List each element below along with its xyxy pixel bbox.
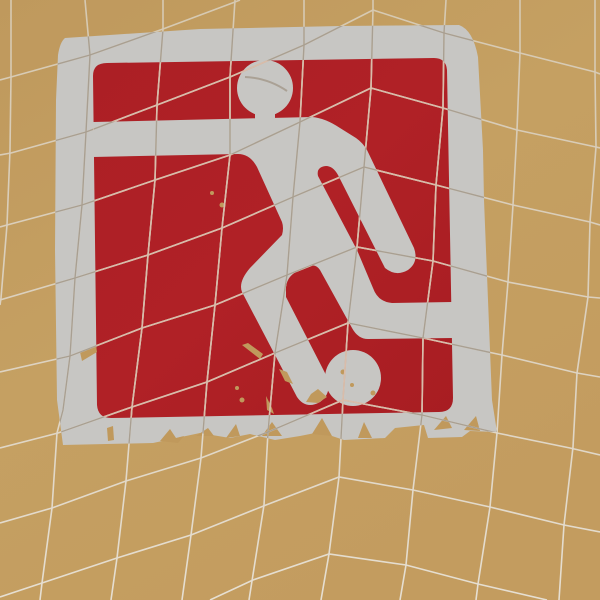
head xyxy=(237,60,293,116)
neck xyxy=(255,108,275,120)
paint wear on the sign xyxy=(80,191,480,443)
sign: red square xyxy=(93,58,453,418)
goal net over red square xyxy=(93,58,452,418)
head stain xyxy=(245,77,287,91)
ball xyxy=(325,350,381,406)
body with arms and legs xyxy=(93,117,453,405)
pictogram: footballer xyxy=(93,60,453,406)
sign: white panel xyxy=(55,25,497,445)
goal net shadow over white panel xyxy=(55,25,497,444)
